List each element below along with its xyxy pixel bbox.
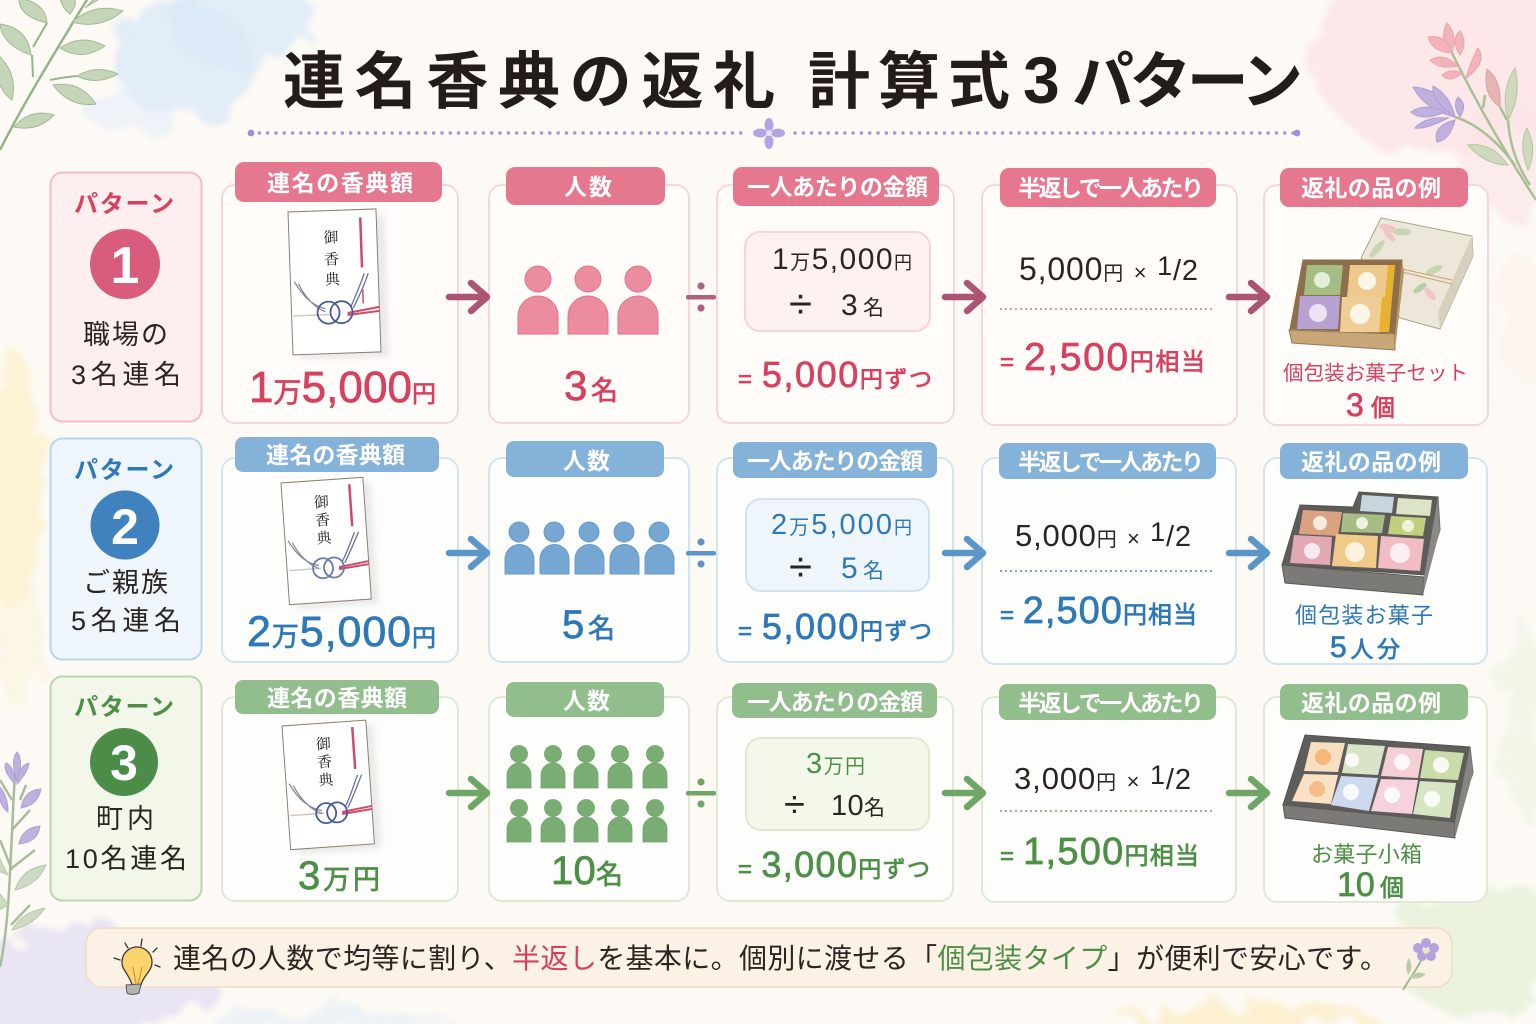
calculation box: ÷ — [789, 543, 812, 590]
icon: three people — [518, 266, 658, 334]
panel: pattern 3 label: 10名連名 — [65, 844, 187, 874]
icon: koden envelope: 御 — [313, 494, 330, 512]
panel: pattern 1 half return: /2 — [1173, 255, 1198, 287]
arrow — [945, 283, 983, 311]
panel: pattern 2 label: ご親族 — [83, 568, 168, 598]
panel: pattern 1 people: 3名 — [564, 362, 618, 409]
panel: pattern 1 label: パターン — [74, 191, 174, 218]
panel: pattern 1 gift example — [1264, 168, 1488, 425]
panel: pattern 1 gift example: 個 — [1371, 395, 1395, 422]
panel: pattern 3 half return: 3,000円 × — [1014, 761, 1139, 796]
title: 連名香典の返礼 — [283, 48, 775, 117]
callout: bottom note: 連名の人数で均等に割り、半返しを基本に。個別に渡せる「個包装タイプ」が便利で安心です。 — [173, 943, 1388, 974]
panel: pattern 3 per person: 一人あたりの金額 — [747, 689, 923, 715]
icon: koden envelope — [281, 477, 379, 610]
icon: koden envelope: 御 — [315, 736, 331, 754]
panel: pattern 2 label: パターン — [74, 457, 174, 484]
arrow — [449, 539, 487, 567]
panel: pattern 1 label: 職場の — [83, 320, 168, 350]
panel: pattern 2 condolence amount: 2万5,000円 — [247, 608, 436, 656]
calculation box: 3 名 — [841, 289, 884, 322]
panel: pattern 2 half return: /2 — [1166, 521, 1191, 553]
panel: pattern 3 half return: /2 — [1166, 764, 1191, 796]
panel: pattern 3 label: 町内 — [96, 804, 154, 834]
panel: pattern 1 label: 3名連名 — [71, 360, 181, 390]
panel: pattern 1 per person: = 5,000円ずつ — [738, 354, 932, 395]
calculation box: 10名 — [831, 790, 885, 822]
icon: koden envelope — [282, 720, 382, 855]
arrow — [449, 779, 487, 807]
panel: pattern 2 gift example: 個包装お菓子 — [1295, 603, 1433, 628]
panel: pattern 2 half return: = 2,500円相当 — [1000, 590, 1197, 632]
panel: pattern 3 label — [50, 676, 202, 900]
panel: pattern 2 gift example: 5人分 — [1330, 631, 1400, 664]
decoration: top-left leafy branch — [0, 0, 123, 150]
panel: pattern 1 people: 人数 — [564, 174, 612, 200]
panel: pattern 3 condolence amount: 3万円 — [298, 854, 380, 898]
panel: pattern 1 half return: 1 — [1157, 251, 1172, 281]
panel: pattern 1 people — [489, 167, 689, 423]
panel: pattern 3 gift example: 個 — [1380, 875, 1404, 902]
panel: pattern 1 condolence amount: 1万5,000円 — [249, 363, 436, 412]
panel: pattern 1 per person: 一人あたりの金額 — [747, 174, 928, 200]
panel: pattern 3 half return — [982, 684, 1236, 902]
panel: pattern 2 label: 5名連名 — [71, 606, 181, 636]
icon: ten people — [507, 746, 667, 842]
panel: pattern 2 half return: 5,000円 × — [1015, 518, 1140, 553]
panel: pattern 3 half return: = 1,500円相当 — [1000, 831, 1199, 873]
calculation box: 1万5,000円 — [772, 243, 912, 276]
panel: pattern 2 label: 2 — [111, 499, 139, 555]
panel: pattern 3 label: 3 — [110, 735, 138, 791]
panel: pattern 1 label — [50, 172, 202, 422]
panel: pattern 1 half return: 半返しで一人あたり — [1018, 175, 1204, 201]
icon: light bulb — [114, 939, 160, 994]
panel: pattern 3 label: パターン — [74, 694, 174, 721]
panel: pattern 2 condolence amount: 連名の香典額 — [266, 442, 405, 468]
panel: pattern 3 people: 10名 — [551, 849, 623, 893]
icon: koden envelope: 典 — [318, 771, 335, 790]
panel: pattern 3 gift example: 返礼の品の例 — [1301, 690, 1441, 716]
panel: pattern 2 label — [50, 438, 202, 660]
panel: pattern 3 gift example: お菓子小箱 — [1311, 842, 1422, 867]
title divider with flower — [248, 118, 1300, 149]
panel: pattern 1 per person — [717, 167, 954, 423]
title: パターン — [1072, 48, 1303, 117]
panel: pattern 3 half return: 半返しで一人あたり — [1018, 690, 1204, 716]
panel: pattern 1 gift example: 3 — [1346, 387, 1364, 423]
icon: koden envelope: 御 — [323, 229, 339, 247]
panel: pattern 1 condolence amount: 連名の香典額 — [267, 170, 413, 196]
calculation box: ÷ — [789, 280, 812, 327]
arrow — [945, 539, 983, 567]
calculation box — [745, 232, 930, 331]
calculation box: 5 名 — [841, 552, 884, 585]
icon: koden envelope: 香 — [317, 754, 333, 772]
calculation box: ÷ — [784, 784, 805, 826]
title: 3 — [1023, 43, 1060, 117]
icon: grey box of ten sweets — [1283, 735, 1473, 838]
panel: pattern 2 per person: 一人あたりの金額 — [747, 448, 923, 474]
panel: pattern 2 half return: 1 — [1150, 517, 1165, 547]
icon: grey tray of sweets — [1282, 492, 1440, 595]
panel: pattern 2 per person: = 5,000円ずつ — [738, 606, 932, 647]
icon: koden envelope: 香 — [315, 512, 331, 530]
panel: pattern 3 per person: = 3,000円ずつ — [738, 844, 930, 885]
panel: pattern 2 condolence amount — [222, 437, 458, 662]
decoration: bottom-left lavender plant — [0, 752, 46, 967]
panel: pattern 1 gift example: 個包装お菓子セット — [1283, 362, 1468, 385]
panel: pattern 3 condolence amount: 連名の香典額 — [267, 685, 407, 711]
panel: pattern 1 label: 1 — [111, 237, 139, 295]
divide sign — [686, 778, 716, 808]
panel: pattern 2 gift example: 返礼の品の例 — [1301, 449, 1441, 475]
panel: pattern 2 people: 人数 — [563, 448, 610, 474]
icon: koden envelope: 典 — [325, 271, 341, 289]
panel: pattern 3 people: 人数 — [563, 688, 610, 714]
panel: pattern 2 per person — [717, 442, 953, 662]
divide sign — [686, 538, 716, 568]
arrow — [945, 779, 983, 807]
panel: pattern 2 gift example — [1264, 443, 1487, 664]
arrow — [449, 283, 487, 311]
calculation box: 2万5,000円 — [771, 509, 912, 541]
panel: pattern 1 gift example: 返礼の品の例 — [1301, 175, 1441, 201]
arrow — [1229, 283, 1267, 311]
arrow — [1229, 779, 1267, 807]
icon: koden envelope: 香 — [324, 251, 340, 269]
arrow — [1229, 539, 1267, 567]
callout: bottom note — [86, 928, 1452, 987]
panel: pattern 1 condolence amount — [222, 162, 458, 423]
panel: pattern 1 half return: = 2,500円相当 — [1000, 336, 1205, 379]
panel: pattern 3 people — [489, 682, 689, 901]
panel: pattern 2 half return: 半返しで一人あたり — [1018, 449, 1204, 475]
panel: pattern 2 people: 5名 — [562, 603, 615, 647]
panel: pattern 1 half return — [982, 168, 1237, 425]
calculation box: 3万円 — [806, 748, 865, 780]
calculation box — [746, 738, 929, 830]
icon: sweets box with lid — [1289, 218, 1473, 350]
panel: pattern 3 half return: 1 — [1150, 760, 1165, 790]
icon: five people — [505, 522, 674, 574]
icon: koden envelope: 典 — [316, 530, 333, 548]
panel: pattern 2 half return — [982, 443, 1236, 664]
panel: pattern 3 gift example: 10 — [1337, 866, 1375, 904]
title — [283, 43, 1303, 117]
title: 計算式 — [808, 48, 1010, 117]
panel: pattern 3 gift example — [1264, 684, 1487, 904]
icon: koden envelope — [288, 209, 389, 360]
panel: pattern 2 people — [489, 441, 689, 662]
calculation box — [746, 499, 929, 591]
divide sign — [686, 282, 716, 312]
icon: small purple flower sprig — [1403, 938, 1439, 990]
panel: pattern 1 half return: 5,000円 × — [1019, 251, 1147, 287]
decoration: top-right flowers — [1411, 23, 1536, 200]
panel: pattern 3 per person — [717, 683, 953, 901]
panel: pattern 3 condolence amount — [222, 680, 458, 901]
